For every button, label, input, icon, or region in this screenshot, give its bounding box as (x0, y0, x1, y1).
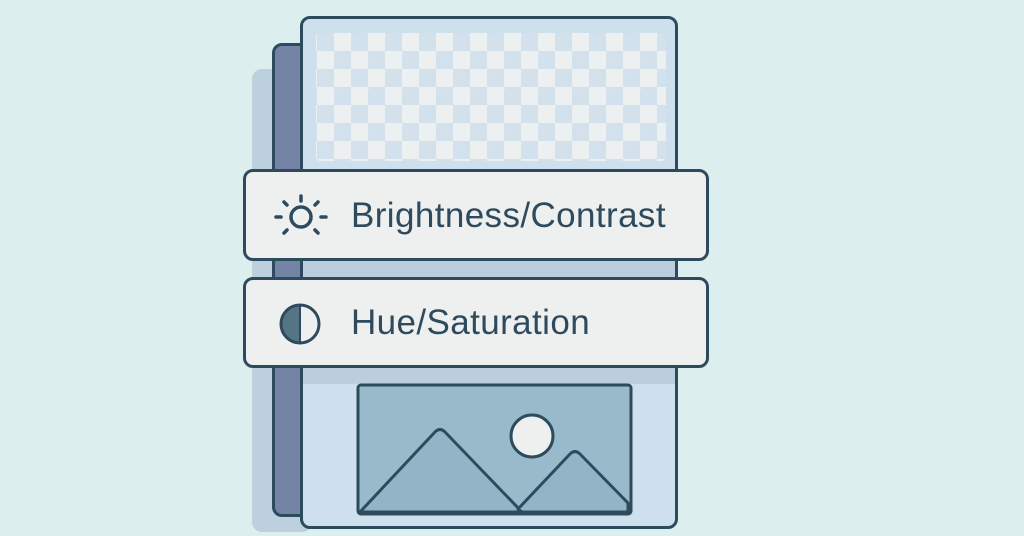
image placeholder icon (356, 384, 632, 516)
label: Brightness/Contrast: Brightness/Contrast (351, 196, 666, 235)
darker middle band (303, 169, 675, 384)
panel: hue/saturation (243, 277, 709, 368)
main sheet (300, 16, 678, 529)
panel: brightness/contrast (243, 169, 709, 261)
checkerboard transparency (316, 33, 666, 161)
back sheet (272, 43, 312, 517)
icon: sun (274, 194, 328, 235)
label: Hue/Saturation: Hue/Saturation (351, 303, 590, 342)
shadow sheet (252, 69, 312, 532)
icon: half circle (280, 304, 320, 344)
